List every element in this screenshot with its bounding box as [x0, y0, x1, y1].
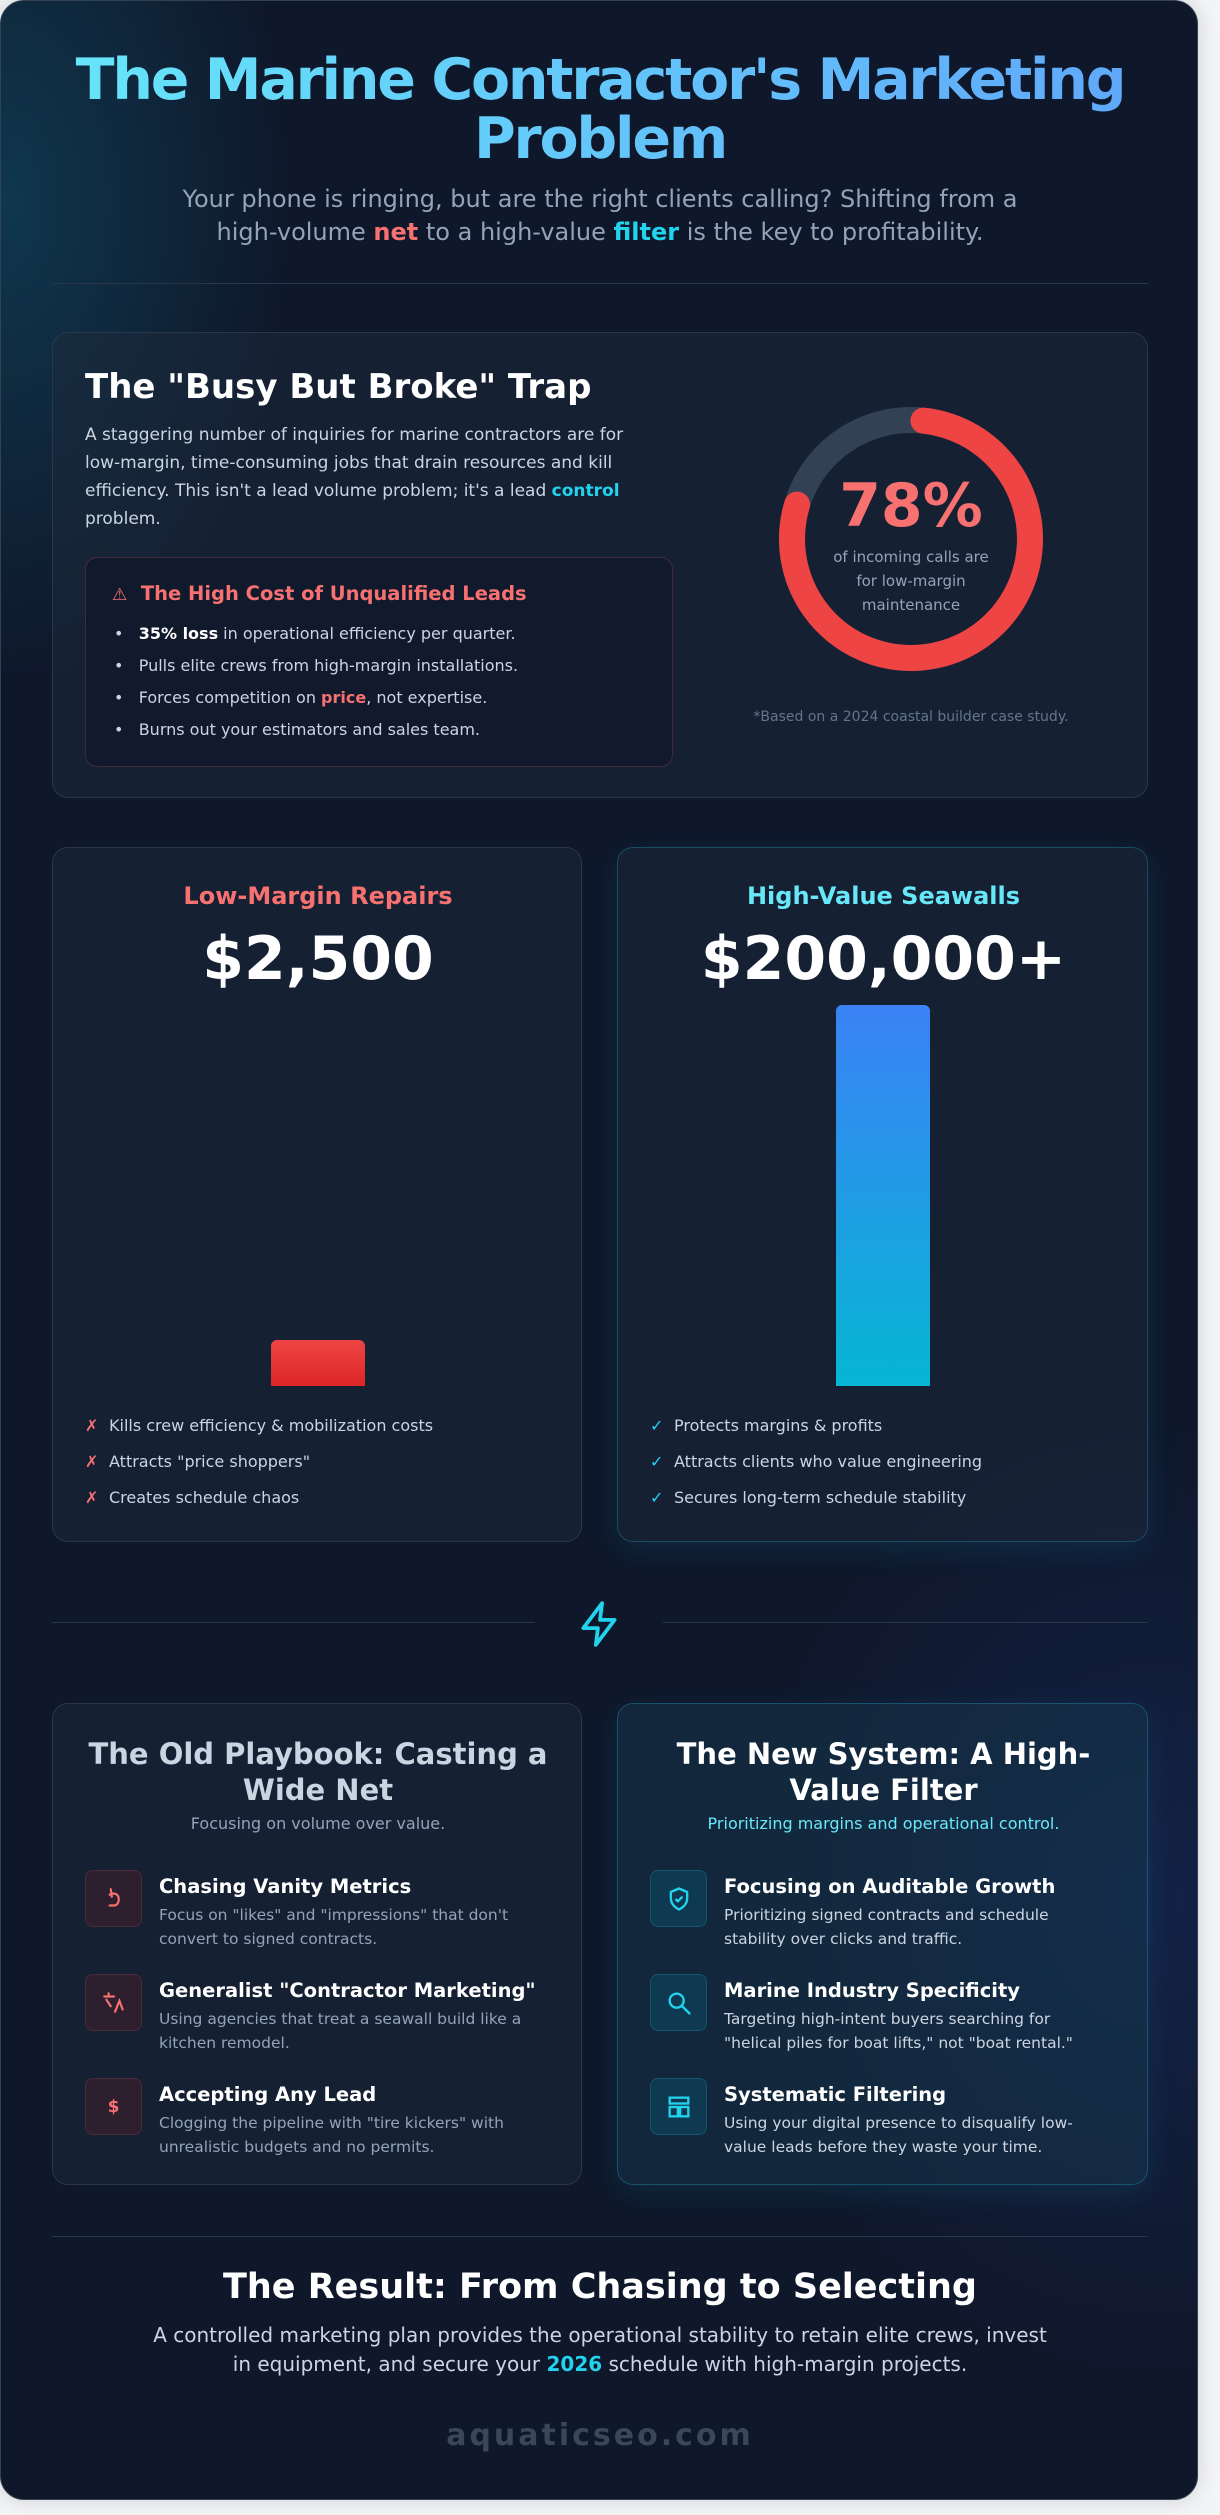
icon: filter layout: [650, 2078, 707, 2135]
text: trap description: A staggering number of inquiries for marine contractors are for low-margin, time-consuming jobs that drain resources and kill efficiency. This isn't a lead volume problem; it's a lead control problem.: [85, 425, 623, 529]
icon: search: [650, 1974, 707, 2031]
icon: shield: [650, 1870, 707, 1927]
heading: trap: The "Busy But Broke" Trap: [85, 367, 591, 407]
subtitle: Your phone is ringing, but are the right clients calling? Shifting from a: [183, 185, 1017, 213]
bar: small: [271, 1340, 365, 1386]
item: generalist: [85, 1974, 536, 2052]
subheading: Prioritizing margins and operational control.: [708, 1814, 1059, 1833]
icon: translate: [85, 1974, 142, 2031]
heading: high cost: ⚠ The High Cost of Unqualified Leads: [112, 582, 527, 605]
list: costs: • Pulls elite crews from high-margin installations.: [114, 656, 518, 675]
item: filtering: [650, 2078, 1073, 2156]
list: negatives: Creates schedule chaos: [109, 1488, 299, 1507]
list: negatives: [85, 1416, 433, 1507]
list: costs: • 35% loss in operational efficiency per quarter.: [114, 624, 516, 643]
list: positives: Attracts clients who value engineering: [674, 1452, 982, 1471]
panel: old playbook: [52, 1703, 582, 2185]
text: result: A controlled marketing plan provides the operational stability to retain elite crews, invest in equipment, and secure your 2026 schedule with high-margin projects.: [153, 2323, 1047, 2376]
list: costs: • Forces competition on price, not expertise.: [114, 688, 487, 707]
item: auditable growth: Focusing on Auditable Growth: [724, 1875, 1055, 1898]
list: costs: • Burns out your estimators and sales team.: [114, 720, 480, 739]
title: The Marine Contractor's Marketing Problem: [76, 47, 1124, 172]
panel: high-value seawalls: [617, 847, 1148, 1542]
item: any lead: [85, 2078, 504, 2156]
callout: high cost of unqualified leads: [85, 557, 673, 767]
item: any lead: Accepting Any Lead: [159, 2083, 376, 2106]
subheading: Focusing on volume over value.: [191, 1814, 445, 1833]
item: vanity metrics: [85, 1870, 508, 1948]
item: auditable growth: Prioritizing signed contracts and schedule stability over clicks and traffic.: [724, 1906, 1049, 1948]
bar: tall: [836, 1005, 930, 1386]
list: negatives: Attracts "price shoppers": [109, 1452, 310, 1471]
list: negatives: ✗: [85, 1452, 98, 1471]
list: positives: Protects margins & profits: [674, 1416, 882, 1435]
icon: lightning: [581, 1601, 617, 1647]
heading: The Old Playbook: Casting a Wide Net: [88, 1737, 548, 1807]
list: positives: ✓: [650, 1452, 663, 1471]
icon: dollar: [85, 2078, 142, 2135]
list: negatives: ✗: [85, 1488, 98, 1507]
list: positives: [650, 1416, 982, 1507]
item: generalist: Generalist "Contractor Marketing": [159, 1979, 536, 2002]
panel: new system: [617, 1703, 1148, 2185]
list: costs: [114, 624, 518, 739]
list: positives: ✓: [650, 1416, 663, 1435]
price: $2,500: [202, 924, 434, 994]
item: filtering: Using your digital presence to disqualify low-value leads before they waste your time.: [724, 2114, 1073, 2156]
list: positives: ✓: [650, 1488, 663, 1507]
donut chart: 78%: 78%: [839, 471, 983, 541]
heading: Low-Margin Repairs: [183, 882, 453, 910]
footer: brand: aquaticseo.com: [446, 2418, 754, 2453]
icon: dollar: $: [108, 2096, 119, 2116]
item: marine specificity: Targeting high-intent buyers searching for: [724, 2010, 1050, 2028]
subtitle: high-volume net to a high-value filter is the key to profitability.: [217, 218, 983, 246]
panel: low-margin repairs: [52, 847, 582, 1542]
list: negatives: ✗: [85, 1416, 98, 1435]
donut chart: 78%: for low-margin: [856, 572, 966, 590]
item: any lead: Clogging the pipeline with "tire kickers" with unrealistic budgets and no permits.: [159, 2114, 504, 2156]
item: vanity metrics: Focus on "likes" and "impressions" that don't convert to signed contracts.: [159, 1906, 508, 1948]
item: vanity metrics: Chasing Vanity Metrics: [159, 1875, 411, 1898]
panel: busy but broke trap: [52, 332, 1148, 798]
donut chart: 78%: maintenance: [862, 596, 960, 614]
heading: High-Value Seawalls: [747, 882, 1020, 910]
item: marine specificity: Marine Industry Specificity: [724, 1979, 1020, 2002]
icon: hand: [85, 1870, 142, 1927]
list: negatives: Kills crew efficiency & mobilization costs: [109, 1416, 433, 1435]
heading: result: The Result: From Chasing to Selecting: [223, 2267, 977, 2307]
item: marine specificity: [650, 1974, 1073, 2052]
subtitle: [182, 185, 1017, 246]
list: positives: Secures long-term schedule stability: [674, 1488, 966, 1507]
donut chart: 78%: [779, 407, 1043, 671]
heading: The New System: A High-Value Filter: [677, 1737, 1090, 1807]
footnote: *Based on a 2024 coastal builder case study.: [753, 709, 1069, 725]
item: generalist: Using agencies that treat a seawall build like a kitchen remodel.: [159, 2010, 521, 2052]
price: $200,000+: [701, 924, 1066, 994]
item: filtering: Systematic Filtering: [724, 2083, 946, 2106]
donut chart: 78%: of incoming calls are: [833, 548, 989, 566]
item: marine specificity: "helical piles for boat lifts," not "boat rental.": [724, 2034, 1073, 2052]
item: auditable growth: [650, 1870, 1055, 1948]
